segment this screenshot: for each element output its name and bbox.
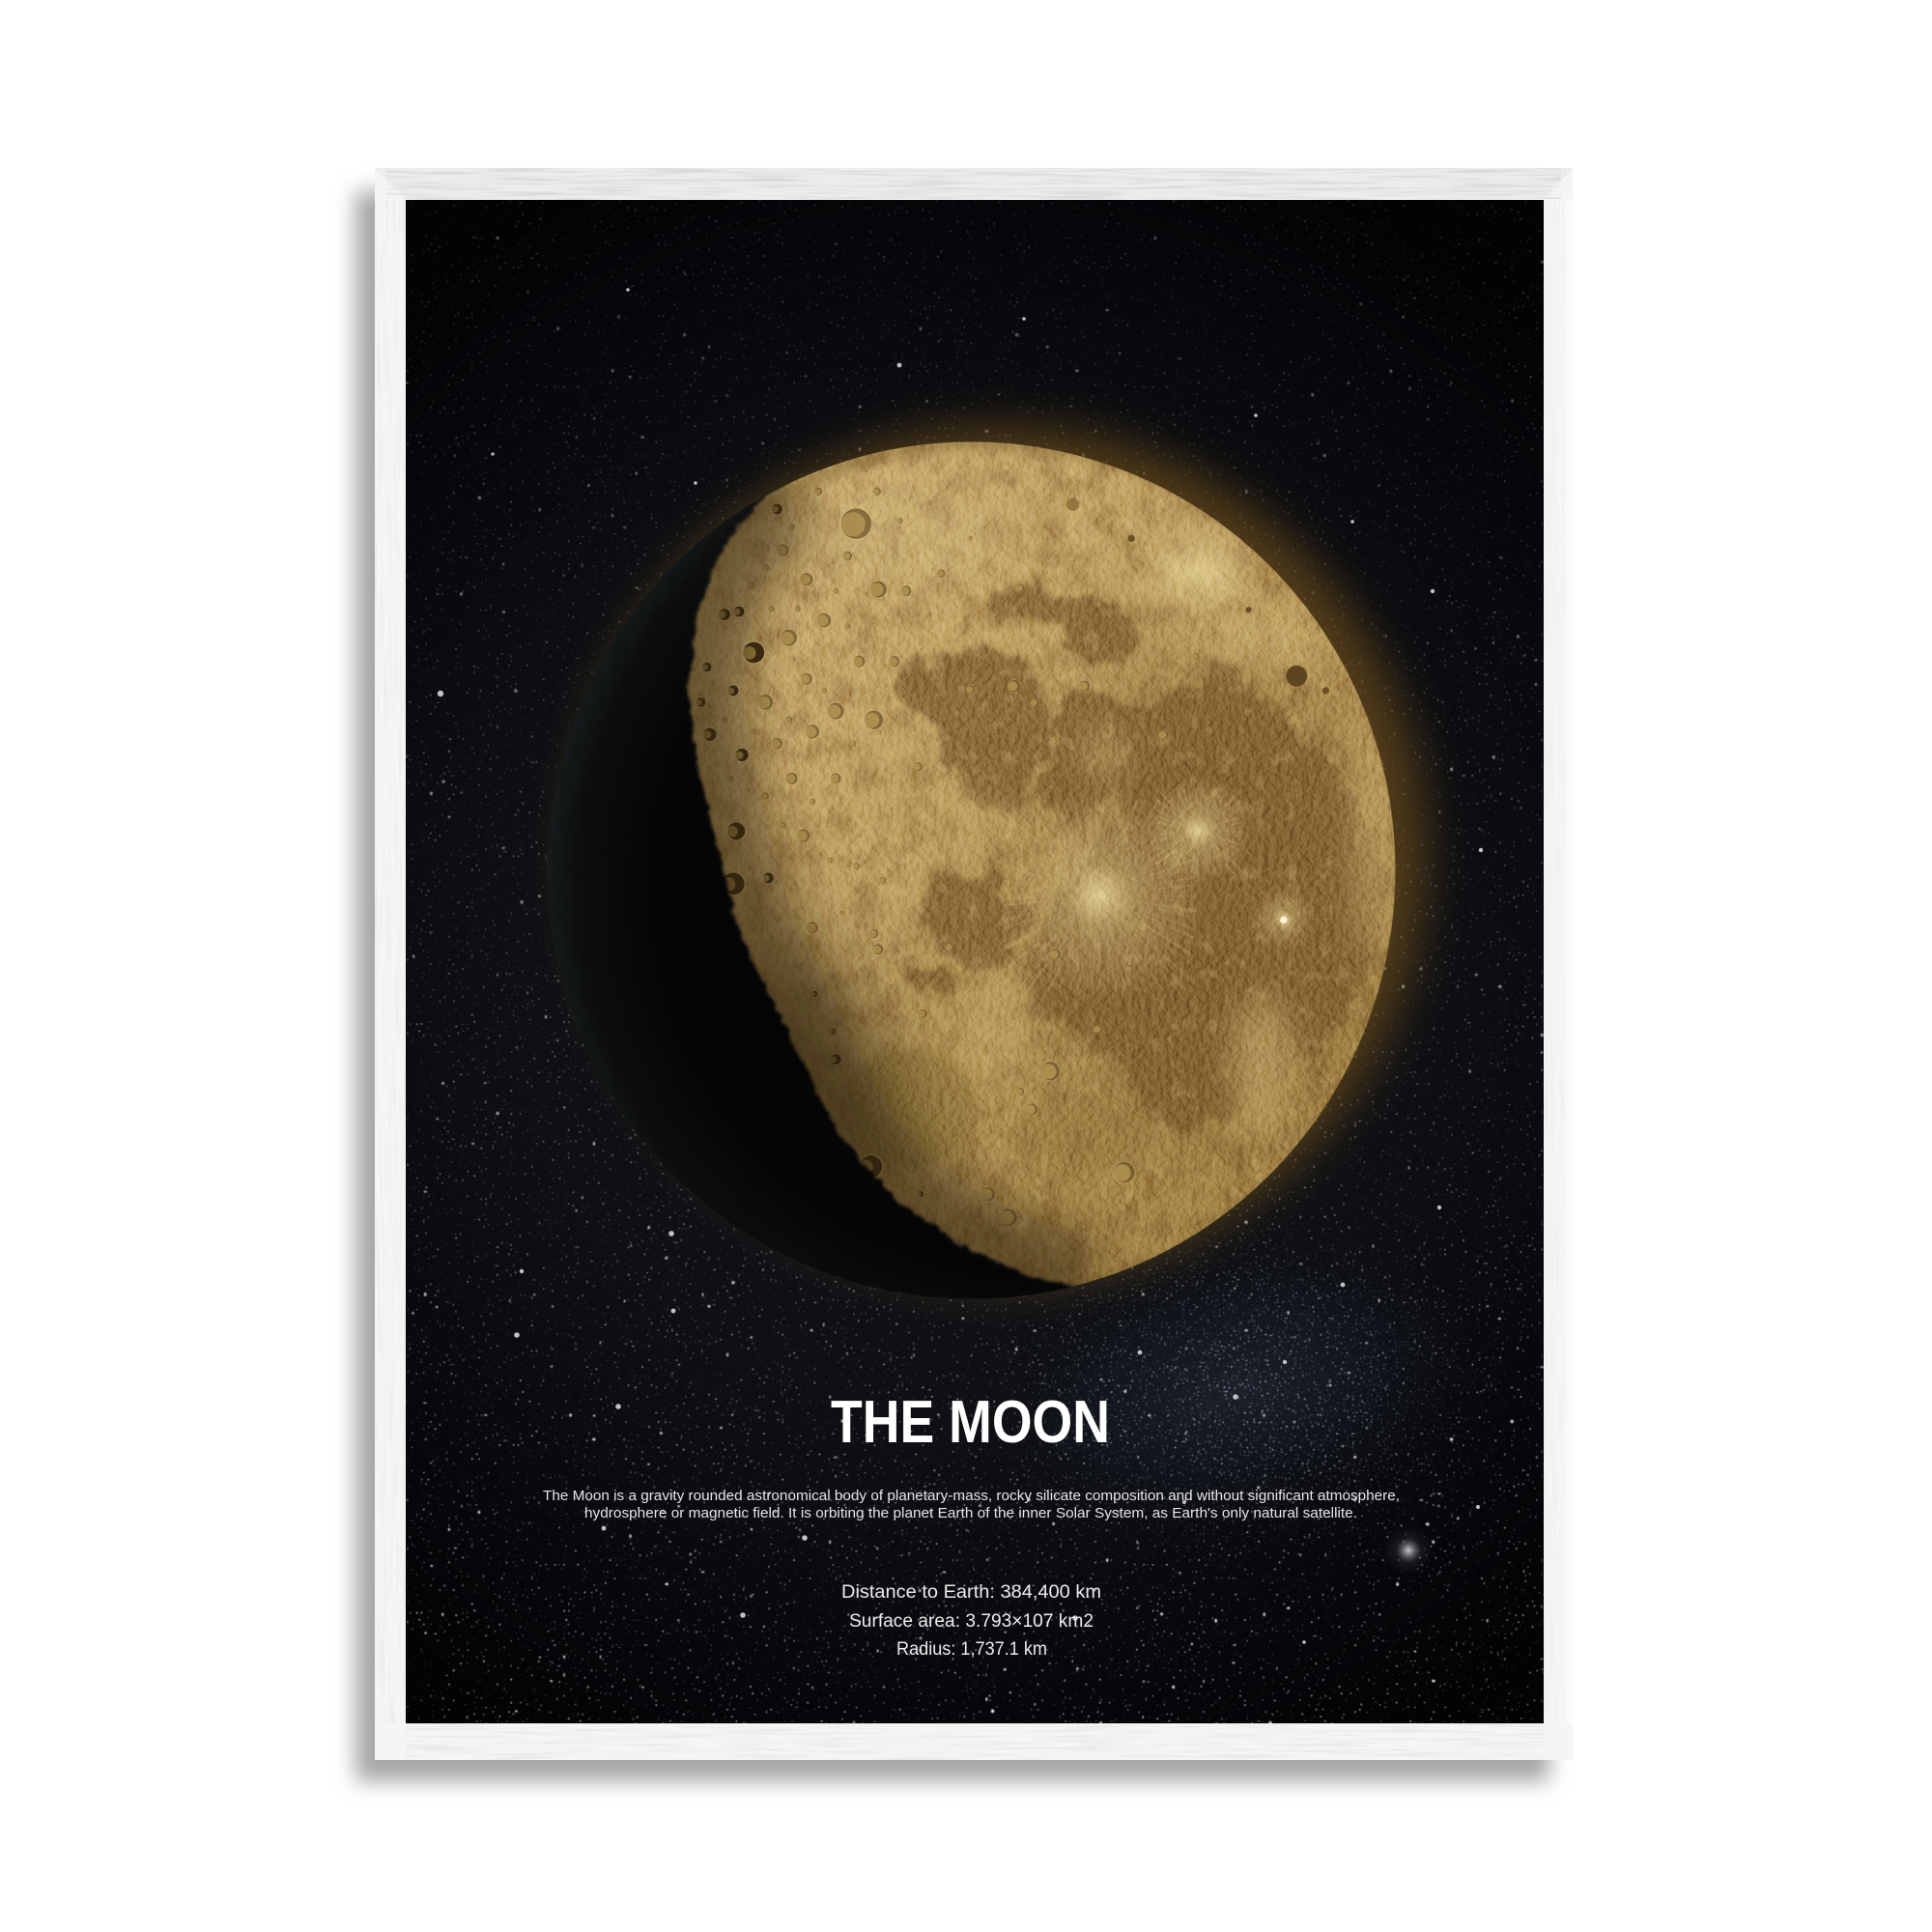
description paragraph: The Moon is a gravity rounded astronomical body of planetary-mass, rocky silicate composition and without significant atmosphere, bbox=[543, 1488, 1400, 1504]
moon statistics bbox=[841, 1582, 1101, 1660]
sunlit surface bbox=[688, 442, 1396, 1287]
shadow side cover bbox=[502, 404, 1088, 1352]
crater rays bbox=[988, 776, 1324, 1007]
larger stars bbox=[438, 288, 1483, 1644]
surface relief texture bbox=[531, 415, 1421, 1311]
moon statistics: Radius: 1,737.1 km bbox=[896, 1639, 1047, 1660]
milky way stars bbox=[983, 1225, 1487, 1560]
moon statistics: Surface area: 3.793×107 km2 bbox=[849, 1611, 1094, 1632]
craters bbox=[696, 487, 1329, 1230]
dark maria patches bbox=[903, 585, 1380, 1135]
moon statistics: Distance to Earth: 384,400 km bbox=[841, 1582, 1101, 1603]
milky way haze bbox=[1111, 1313, 1385, 1470]
lower dark plain bbox=[1006, 1100, 1146, 1171]
bright glowing star bbox=[1389, 1531, 1428, 1570]
description paragraph bbox=[543, 1488, 1400, 1521]
flat plain crater bbox=[839, 1051, 978, 1168]
star field bbox=[406, 200, 1544, 1723]
bright speckled highlands bbox=[752, 443, 1379, 1279]
bright highland patches bbox=[812, 486, 1392, 1135]
terminator shading bbox=[687, 485, 1088, 1288]
title: THE MOON bbox=[831, 1389, 1110, 1456]
mottled tone bbox=[696, 442, 1395, 1282]
frame drop shadow bbox=[355, 191, 1549, 1781]
broad brown basin on right half bbox=[1000, 662, 1386, 1129]
moon bbox=[547, 401, 1450, 1307]
poster: night sky bbox=[406, 200, 1544, 1723]
shadowed side of moon bbox=[548, 441, 1396, 1299]
golden glow behind moon bbox=[575, 427, 1425, 1282]
white wooden frame bbox=[375, 168, 1573, 1760]
lower-left dimming bbox=[684, 954, 895, 1235]
description paragraph: hydrosphere or magnetic field. It is orbiting the planet Earth of the inner Solar System, as Earth's only natural satellite. bbox=[584, 1505, 1357, 1521]
limb darkening bbox=[564, 441, 1412, 1299]
